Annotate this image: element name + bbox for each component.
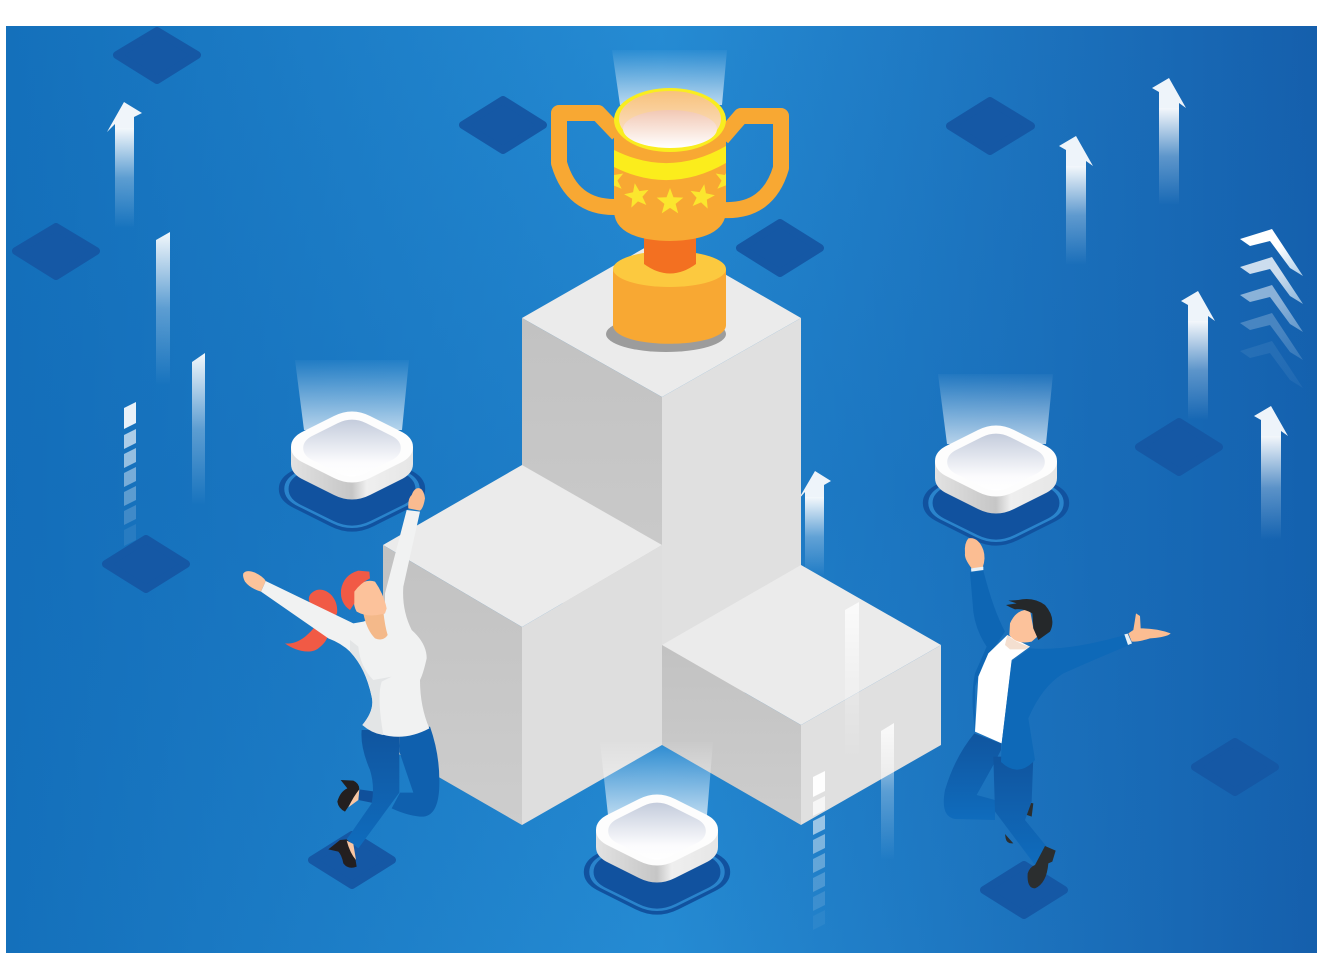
front leg xyxy=(347,730,400,848)
lower foot xyxy=(347,841,356,860)
woman: upper body xyxy=(243,488,429,737)
ponytail xyxy=(285,590,337,651)
bent leg xyxy=(944,733,1001,820)
man jumping xyxy=(944,538,1171,888)
pad: left xyxy=(279,412,425,532)
lower shoe xyxy=(328,839,357,868)
base shadow xyxy=(606,316,726,352)
light beam: left xyxy=(295,360,409,430)
segmented bar: left xyxy=(124,402,136,546)
shirt xyxy=(975,635,1030,743)
cup rim xyxy=(614,88,726,152)
upper shoe xyxy=(337,780,359,812)
hair xyxy=(1006,599,1052,640)
back shoe lower xyxy=(1005,834,1013,843)
bar: left tall xyxy=(156,232,170,385)
man: legs xyxy=(944,733,1056,888)
right handle xyxy=(722,116,781,210)
arrow: right 4 xyxy=(1254,406,1288,540)
bent leg xyxy=(392,727,439,817)
stars xyxy=(614,173,726,214)
shirt shading xyxy=(350,640,392,735)
trophy xyxy=(559,50,781,352)
arrow: right 3 xyxy=(1181,291,1215,420)
trophy stem xyxy=(644,232,696,274)
bars over right cube xyxy=(813,602,894,930)
raised hand xyxy=(965,538,985,568)
arrow: centre behind podium xyxy=(798,471,831,577)
chevrons xyxy=(1240,229,1303,388)
neck and collar xyxy=(1005,635,1030,649)
woman: legs xyxy=(328,727,439,868)
light beam: right xyxy=(938,374,1053,444)
light beam: bottom xyxy=(600,742,713,815)
torso and arms xyxy=(261,510,429,737)
bar: left short xyxy=(192,353,205,505)
raised hand xyxy=(408,488,425,511)
raised cuff xyxy=(971,567,983,572)
light beam: trophy xyxy=(612,50,727,105)
pad: bottom xyxy=(584,794,730,915)
back lower leg xyxy=(358,789,375,803)
button: right xyxy=(923,374,1069,546)
trophy base xyxy=(613,251,726,344)
hair xyxy=(341,571,370,610)
segmented bar: on cube xyxy=(813,771,825,930)
button: left xyxy=(279,360,425,532)
arrow: right 1 xyxy=(1152,78,1186,205)
open cuff xyxy=(1124,634,1132,645)
yellow band xyxy=(614,146,726,180)
button: bottom xyxy=(584,742,730,915)
jacket xyxy=(1001,635,1129,770)
face xyxy=(1009,610,1037,642)
back shoe upper xyxy=(1022,802,1033,817)
cup body xyxy=(614,120,726,241)
left handle xyxy=(559,113,618,207)
open hand xyxy=(1128,613,1171,642)
cube: right tier xyxy=(662,565,941,825)
podium xyxy=(383,238,941,825)
cube: left tier xyxy=(383,465,662,825)
woman jumping xyxy=(243,488,439,868)
upper foot xyxy=(348,789,359,807)
arrows rising, right group xyxy=(1059,78,1303,540)
arrows rising, left group xyxy=(107,102,205,546)
neck xyxy=(363,612,388,639)
arrow: right 2 xyxy=(1059,136,1093,265)
arrow: left top xyxy=(107,102,142,228)
pad: right xyxy=(923,426,1069,546)
face xyxy=(354,581,387,615)
bar: on cube short xyxy=(881,723,894,860)
left hand xyxy=(243,571,266,592)
sleeve and jacket back xyxy=(970,571,1005,730)
cube: top tier xyxy=(522,238,801,740)
front shoe xyxy=(1028,846,1056,888)
front leg xyxy=(993,757,1047,865)
man: upper body xyxy=(965,538,1171,770)
bar: on cube tall xyxy=(845,602,859,760)
